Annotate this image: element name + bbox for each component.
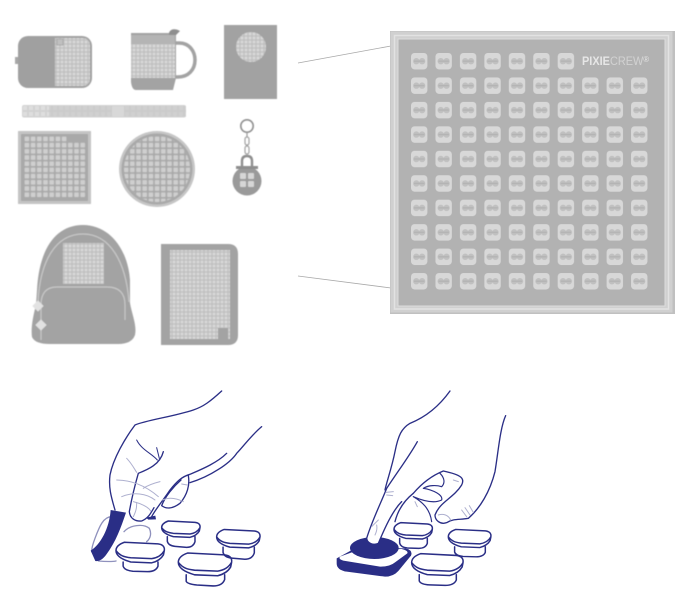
pixel tile — [178, 553, 232, 586]
callout line: bottom — [298, 276, 391, 288]
icon: mug — [131, 29, 195, 90]
icon: keychain — [232, 120, 262, 196]
pixel tile — [412, 554, 463, 585]
pixel tile — [448, 529, 491, 557]
pixel tile — [394, 523, 432, 548]
hand outline — [110, 391, 262, 521]
icon: round panel — [119, 131, 195, 207]
product illustrations — [15, 25, 277, 345]
icon: zip folder — [161, 244, 238, 345]
illustration: hand lifting pixel tool — [91, 391, 262, 586]
icon: pouch — [15, 36, 92, 88]
pixel tile — [217, 529, 260, 559]
pixel tile — [116, 542, 164, 572]
tool band — [91, 510, 156, 561]
panel: enlarged pixel board — [390, 31, 675, 314]
illustration: finger pressing pixel tool — [337, 391, 506, 585]
pixel tile — [162, 521, 200, 547]
pixel grid — [407, 49, 652, 294]
logo: PIXIECREW — [582, 56, 645, 68]
hand outline — [367, 391, 506, 544]
tool on tile — [337, 537, 412, 577]
icon: strap — [22, 105, 186, 118]
callout line: top — [298, 46, 391, 63]
icon: square panel — [18, 131, 91, 204]
icon: notebook with round panel — [224, 25, 277, 99]
logo: ® — [643, 55, 649, 64]
icon: backpack — [32, 225, 135, 344]
